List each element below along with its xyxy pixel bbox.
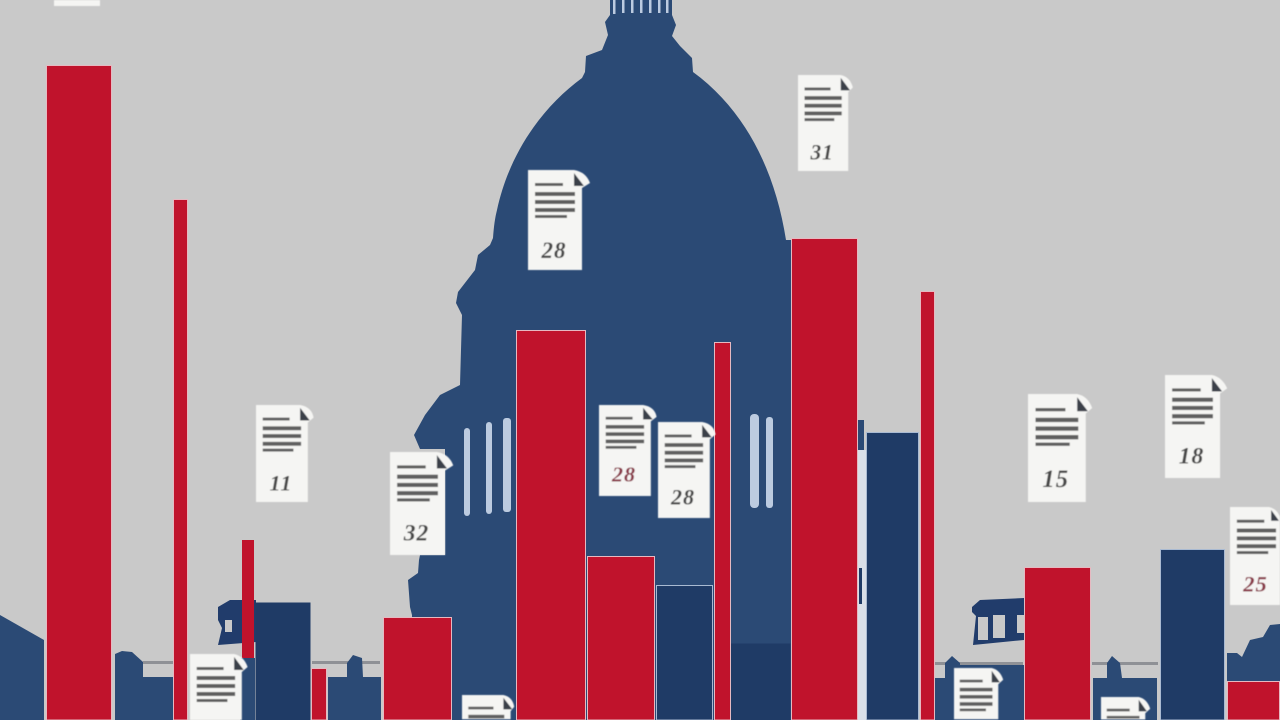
- left colonnade columns: [464, 418, 511, 516]
- document: far right: 25: [1242, 571, 1268, 596]
- document: upper right: [1165, 375, 1227, 478]
- document: centre pair left: [599, 405, 657, 496]
- document: bottom right one: [954, 668, 1003, 719]
- right wing: [1227, 624, 1280, 681]
- small dome sliver: [858, 420, 864, 450]
- document: centre pair right: [658, 422, 716, 518]
- document: capitol left edge: 32: [403, 520, 429, 547]
- far right pavilion: [1093, 656, 1157, 720]
- document: upper right: 18: [1179, 443, 1204, 470]
- document: left: 11: [270, 470, 292, 495]
- document: on dome: 28: [540, 238, 566, 263]
- document: right: 15: [1042, 466, 1069, 493]
- document: top centre-right: [798, 75, 853, 171]
- document: on dome: [528, 170, 590, 270]
- document: capitol left edge: [390, 452, 453, 555]
- left wing: [0, 615, 44, 720]
- left domed pavilion: [328, 655, 381, 720]
- document: top centre-right: 31: [810, 140, 834, 165]
- skyline: left wing and small buildings: [0, 420, 1280, 720]
- capitol building silhouette: [408, 0, 792, 720]
- document: centre pair left: 28: [611, 463, 636, 486]
- document: far right: [1230, 507, 1280, 605]
- navy strip under short red bar: [240, 658, 255, 720]
- document: bottom centre: [462, 695, 514, 719]
- document: bottom left: [190, 654, 248, 720]
- lantern columns: [613, 0, 668, 14]
- dark sliver on pale strip: [859, 568, 862, 604]
- document: bottom right two: [1101, 697, 1150, 720]
- right colonnade columns: [750, 414, 773, 508]
- document: right: [1028, 394, 1092, 502]
- document: top-left stub: [54, 0, 100, 6]
- document: centre pair right: 28: [670, 485, 695, 510]
- left temple fragment: [218, 600, 256, 645]
- pale strip beside tall navy bar: [858, 450, 866, 720]
- grey balustrade lines: [143, 661, 1158, 665]
- document: left: [256, 405, 314, 502]
- navy bars: [256, 432, 1224, 720]
- left pavilion: [115, 651, 173, 720]
- right domed pavilion: [935, 656, 1024, 720]
- right temple fragment: [972, 598, 1024, 645]
